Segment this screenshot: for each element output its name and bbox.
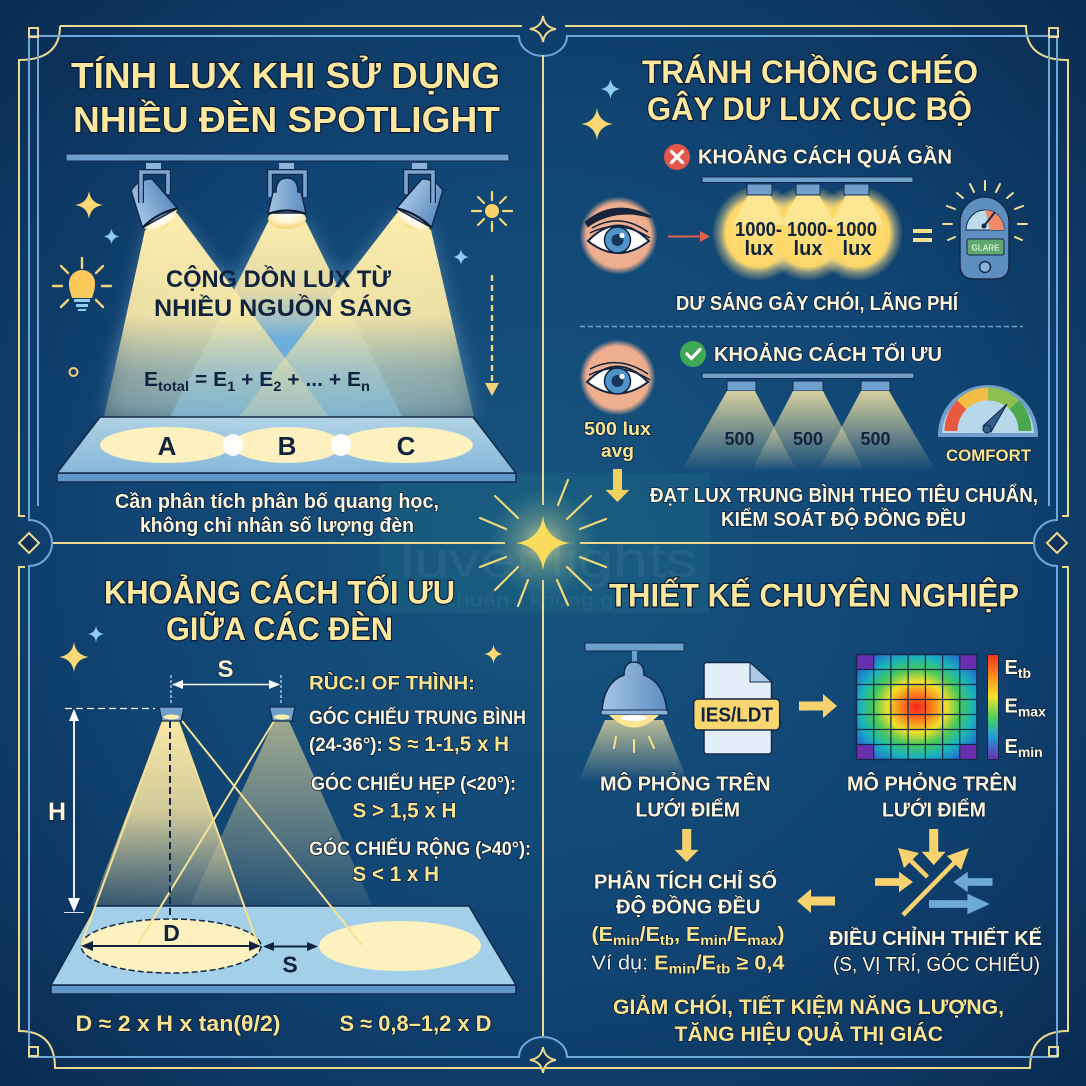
title <box>71 54 500 140</box>
formula: + ... + E <box>282 369 361 391</box>
icon: light bulb <box>53 258 111 311</box>
label: simulation right <box>847 772 1017 822</box>
values 500: 500 <box>724 429 755 449</box>
rules of thumb: (24-36°): S ≈ 1-1,5 x H <box>309 733 509 756</box>
soft halo around beams <box>104 215 474 417</box>
arrow: red <box>668 231 710 242</box>
floor plane <box>57 417 516 482</box>
formula: E <box>144 369 157 391</box>
equals sign <box>913 229 932 242</box>
spacing dimension S top: S <box>217 656 234 683</box>
spotlight right <box>391 163 452 237</box>
icon: blue sparkle <box>600 79 620 99</box>
panel: bottom-right professional design <box>578 578 1046 1046</box>
scale labels: E <box>1004 696 1018 718</box>
formulas bottom <box>76 1011 492 1036</box>
scale labels: max <box>1018 704 1046 720</box>
light pools <box>81 919 481 973</box>
arrow: down left <box>675 829 699 862</box>
zone labels A B C: B <box>278 431 296 461</box>
caption: optimal <box>650 483 1038 531</box>
icon: blue sparkle <box>88 626 104 642</box>
watermark: luvet lights <box>400 532 697 588</box>
heatmap <box>856 654 977 760</box>
caption: optimal: KIỂM SOÁT ĐỘ ĐỒNG ĐỀU <box>721 507 966 531</box>
heading: too close: KHOẢNG CÁCH QUÁ GẦN <box>698 146 952 168</box>
caption <box>115 491 439 537</box>
rules of thumb: GÓC CHIẾU TRUNG BÌNH <box>309 707 526 729</box>
icon: yellow sparkle <box>581 108 613 140</box>
frame node: left <box>19 533 39 553</box>
formulas bottom: D ≈ 2 x H x tan(θ/2) <box>76 1011 280 1036</box>
scale labels: E <box>1004 736 1018 758</box>
scale labels: tb <box>1018 665 1031 681</box>
analysis text: Ví dụ: E <box>592 952 668 974</box>
center sunburst <box>480 480 606 606</box>
icon: yellow sparkle <box>59 642 89 672</box>
title: TRÁNH CHỒNG CHÉO <box>642 54 978 90</box>
title <box>104 574 455 647</box>
zone labels A B C: A <box>158 431 177 461</box>
analysis text <box>592 870 785 976</box>
analysis text: ĐỘ ĐỒNG ĐỀU <box>616 894 760 918</box>
analysis text: /E <box>727 924 747 946</box>
title <box>642 54 978 127</box>
adjust text: ĐIỀU CHỈNH THIẾT KẾ <box>829 927 1042 950</box>
lux values: lux <box>794 238 822 260</box>
rules of thumb: GÓC CHIẾU RỘNG (>40°): <box>309 838 531 860</box>
overlay text: additive lux <box>154 265 412 322</box>
light beams <box>104 213 474 417</box>
formulas bottom: S ≈ 0,8–1,2 x D <box>340 1011 492 1036</box>
track and fixtures: close <box>702 177 913 195</box>
height dimension H: H <box>48 798 66 826</box>
icon: red cross <box>664 144 690 170</box>
label: simulation right: MÔ PHỎNG TRÊN <box>847 772 1017 796</box>
analysis text: min <box>669 960 696 976</box>
analysis text: tb <box>660 932 674 948</box>
analysis text: /E <box>640 924 660 946</box>
track rail <box>66 154 509 161</box>
panel: top-left multi-spotlight lux <box>53 54 516 537</box>
frame node: right <box>1047 533 1067 553</box>
formula: = E <box>189 369 227 391</box>
blue glow behind beams <box>98 250 478 490</box>
heading: optimal: KHOẢNG CÁCH TỐI ƯU <box>714 342 942 366</box>
rules of thumb: GÓC CHIẾU HẸP (<20°): <box>311 773 516 795</box>
caption: too close: DƯ SÁNG GÂY CHÓI, LÃNG PHÍ <box>676 291 958 315</box>
icon: glare meter <box>943 181 1027 279</box>
icon: IES/LDT document <box>694 662 780 754</box>
label: simulation left: LƯỚI ĐIỂM <box>636 798 740 822</box>
floor plane <box>51 906 516 994</box>
watermark <box>400 532 697 610</box>
title: KHOẢNG CÁCH TỐI ƯU <box>104 574 455 610</box>
icon: comfort gauge <box>940 387 1036 435</box>
rules of thumb: RÙC:I OF THÌNH: <box>309 672 475 694</box>
adjust text <box>829 927 1042 976</box>
formula: 1 <box>227 378 236 394</box>
lux values: lux <box>843 238 871 260</box>
rules of thumb: S < 1 x H <box>352 863 439 886</box>
light cones <box>681 391 936 471</box>
icon: yellow sparkle <box>75 191 103 219</box>
title: NHIỀU ĐÈN SPOTLIGHT <box>73 99 500 140</box>
scale labels: min <box>1018 744 1043 760</box>
rules of thumb: S > 1,5 x H <box>352 800 456 822</box>
arrow: down <box>606 469 630 502</box>
watermark: chuẩn · không gian <box>445 590 645 610</box>
dimension S floor: S <box>282 952 298 978</box>
spotlight center <box>268 163 306 229</box>
icon: small ring <box>70 368 78 376</box>
formula: 2 <box>273 378 282 394</box>
spacing dimension S top <box>171 656 281 704</box>
overlapping glow circles <box>712 185 903 281</box>
scale labels: E <box>1004 657 1018 679</box>
formula: total <box>158 378 189 394</box>
beam second light <box>190 721 372 905</box>
lux values: lux <box>745 238 773 260</box>
frame node: top <box>530 16 556 42</box>
lux values: 1000- <box>735 219 782 241</box>
scale labels <box>1004 657 1046 760</box>
analysis text: (E <box>592 924 612 946</box>
adjust text: (S, VỊ TRÍ, GÓC CHIẾU) <box>833 953 1040 976</box>
formula: n <box>361 378 370 394</box>
track and fixtures: optimal <box>702 373 914 391</box>
title: GIỮA CÁC ĐÈN <box>166 611 393 647</box>
title: GÂY DƯ LUX CỤC BỘ <box>647 91 972 127</box>
lux average label: 500 lux <box>584 419 651 439</box>
icon: IES/LDT document: IES/LDT <box>700 704 773 726</box>
analysis text: ) <box>777 924 784 946</box>
lux values <box>735 219 877 260</box>
panel: top-right avoid overlap <box>580 54 1038 531</box>
values 500: 500 <box>860 429 891 449</box>
icon: eye <box>580 340 656 416</box>
label: simulation left <box>600 772 770 822</box>
title: THIẾT KẾ CHUYÊN NGHIỆP <box>609 578 1019 614</box>
analysis text: max <box>747 932 778 948</box>
frame node: bottom <box>530 1047 556 1073</box>
label: simulation right: LƯỚI ĐIỂM <box>882 798 986 822</box>
dimension S floor <box>263 942 318 978</box>
zone labels A B C: C <box>397 431 416 461</box>
label: simulation left: MÔ PHỎNG TRÊN <box>600 772 770 796</box>
dimension D: D <box>163 920 180 946</box>
lux values: 1000- <box>787 219 833 241</box>
color scale <box>988 654 998 760</box>
overlay text: additive lux: NHIỀU NGUỒN SÁNG <box>154 294 412 322</box>
spotlight left <box>122 163 183 237</box>
conclusion: TĂNG HIỆU QUẢ THỊ GIÁC <box>674 1022 943 1046</box>
lux values: 1000 <box>836 219 877 241</box>
zone labels A B C <box>158 431 416 461</box>
overlay text: additive lux: CỘNG DỒN LUX TỪ <box>166 265 391 293</box>
values 500 <box>724 429 891 449</box>
analysis text: , E <box>674 924 700 946</box>
icon: blue sparkle right <box>453 249 469 265</box>
comfort label: COMFORT <box>946 446 1032 465</box>
values 500: 500 <box>793 429 823 449</box>
arrow: down right <box>922 829 946 865</box>
caption: không chỉ nhân số lượng đèn <box>140 515 414 537</box>
arrow: dashed downward <box>485 275 499 396</box>
analysis text: tb <box>716 960 730 976</box>
analysis text: /E <box>696 952 716 974</box>
formula: + E <box>235 369 273 391</box>
analysis text: min <box>613 932 640 948</box>
caption: optimal: ĐẠT LUX TRUNG BÌNH THEO TIÊU CHUẨN, <box>650 483 1038 507</box>
icon: blue sparkle <box>104 228 120 244</box>
conclusion <box>613 995 1004 1046</box>
icon: pendant lamp <box>578 643 688 782</box>
dimension D <box>81 920 261 951</box>
lux average label <box>584 419 651 461</box>
rules of thumb <box>309 672 531 886</box>
analysis text: PHÂN TÍCH CHỈ SỐ <box>594 870 777 894</box>
icon: sun <box>472 192 512 231</box>
beam edge lines <box>81 721 362 945</box>
icon: glare meter: GLARE <box>972 244 1000 252</box>
center watermark tint <box>380 473 710 613</box>
icon: green check <box>680 341 706 367</box>
height dimension H <box>48 708 155 912</box>
beam first light <box>92 721 245 905</box>
icon: adjustment arrows <box>875 848 992 915</box>
conclusion: GIẢM CHÓI, TIẾT KIỆM NĂNG LƯỢNG, <box>613 995 1004 1019</box>
caption: Cần phân tích phân bố quang học, <box>115 491 439 513</box>
icon: small sparkle <box>484 644 503 664</box>
icon: eye with brow <box>580 196 658 274</box>
lux average label: avg <box>601 441 634 461</box>
analysis text: min <box>700 932 727 948</box>
title: TÍNH LUX KHI SỬ DỤNG <box>71 54 500 96</box>
analysis text: ≥ 0,4 <box>730 952 785 974</box>
panel: bottom-left optimal spacing <box>48 574 531 1036</box>
arrow: left <box>797 889 835 913</box>
arrow: right <box>799 694 837 718</box>
fixtures <box>159 707 295 721</box>
